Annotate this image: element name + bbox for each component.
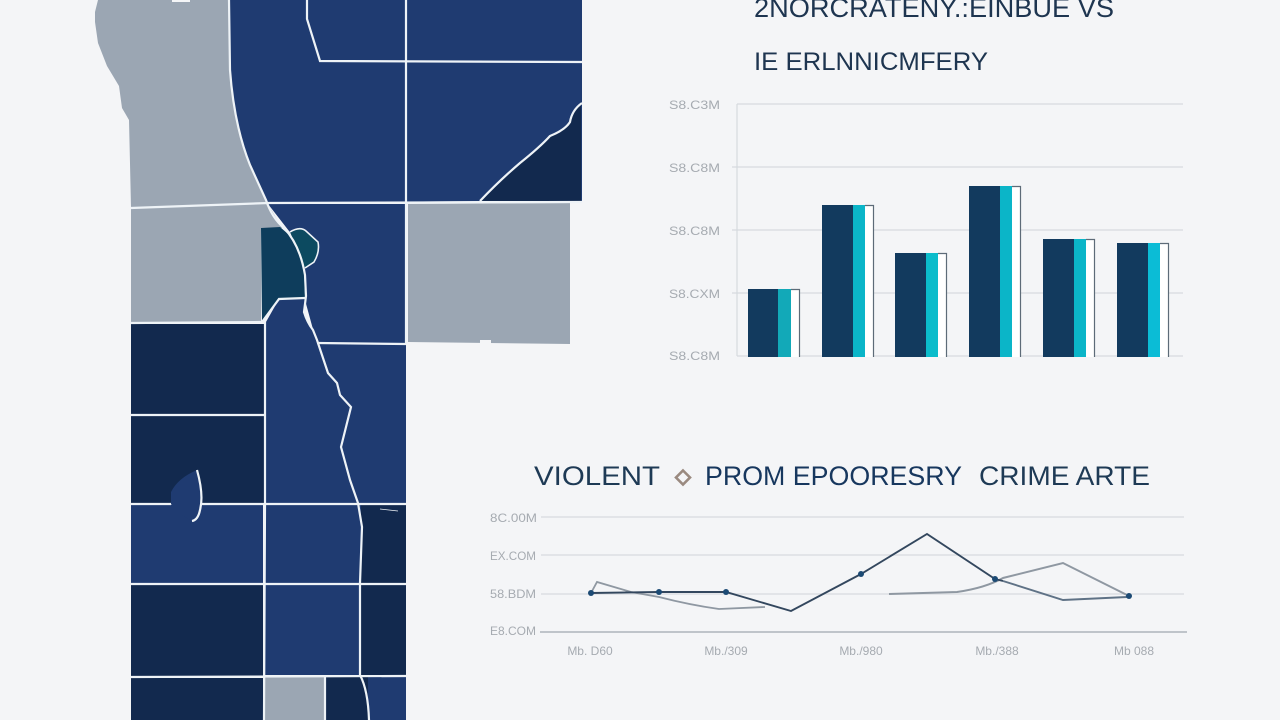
region: dark county south xyxy=(326,677,370,720)
line chart y axis labels: 58.BDM xyxy=(490,587,536,601)
region: north-west gray county xyxy=(95,0,270,207)
region: teal lake xyxy=(290,229,318,268)
map notch: east county edge xyxy=(480,340,491,344)
region: blue lake xyxy=(171,470,201,522)
line chart y axis labels: 8C.00M xyxy=(490,511,537,525)
bar chart y axis labels: S8.C8M xyxy=(669,161,720,175)
region: dark county east 3 xyxy=(361,505,406,583)
icon: diamond separator xyxy=(676,470,690,484)
bar chart grid xyxy=(732,104,1183,356)
region: dark county row 4 xyxy=(131,585,263,676)
bar group 4 xyxy=(969,186,1020,357)
region: dark county row 2 xyxy=(131,416,264,503)
choropleth map xyxy=(95,0,582,720)
line chart xyxy=(490,511,1187,658)
bar group 5 xyxy=(1043,239,1094,357)
region: northern blue counties xyxy=(230,0,582,203)
line chart y axis labels: E8.COM xyxy=(490,624,536,638)
bar group 2 xyxy=(822,205,874,357)
bar chart y axis labels: S8.CXM xyxy=(669,287,720,301)
county boundary lines xyxy=(131,0,582,720)
top chart title xyxy=(754,0,1114,76)
line chart x axis labels: Mb./980 xyxy=(839,644,883,658)
line chart title xyxy=(534,461,1150,491)
region: east gray county xyxy=(408,203,570,344)
bar chart y axis labels: S8.C8M xyxy=(669,349,720,363)
map notch: top edge xyxy=(172,0,190,2)
bar group 1 xyxy=(748,289,800,357)
region: north-east dark county xyxy=(480,105,581,201)
series markers xyxy=(588,571,1132,599)
series: dark line fading tail xyxy=(1003,581,1127,600)
line chart y axis labels xyxy=(490,511,537,638)
bar group 6 xyxy=(1117,243,1168,357)
title word: crime rate: CRIME ARTE xyxy=(979,461,1150,491)
region: dark county row 5 xyxy=(131,678,263,720)
region: blue county row 3 xyxy=(131,505,263,583)
bar chart y axis labels xyxy=(669,98,720,363)
region: blue county middle 3 xyxy=(265,505,361,583)
line chart x axis labels: Mb./309 xyxy=(704,644,748,658)
region: dark county east 4 xyxy=(361,585,406,675)
region: teal county xyxy=(261,227,305,322)
bar group 3 xyxy=(895,253,946,357)
region: blue county south xyxy=(368,677,406,720)
region: dark county row 1 xyxy=(131,324,264,414)
bar chart y axis labels: S8.C8M xyxy=(669,224,720,238)
bar chart y axis labels: S8.C3M xyxy=(669,98,720,112)
title word: property: PROM EPOORESRY xyxy=(705,461,962,491)
bar chart xyxy=(669,98,1183,363)
line chart x axis labels: Mb. D60 xyxy=(567,644,613,658)
line chart x axis labels: Mb./388 xyxy=(975,644,1019,658)
region: south central blue county xyxy=(266,298,406,504)
region: blue county middle 4 xyxy=(265,585,361,675)
series: dark line xyxy=(591,534,1003,611)
title line 2: IE ERLNNICMFERY xyxy=(754,48,988,76)
line chart grid xyxy=(540,517,1187,632)
line chart x axis labels: Mb 088 xyxy=(1114,644,1154,658)
line chart x axis labels xyxy=(567,644,1154,658)
line chart y axis labels: EX.COM xyxy=(490,549,536,563)
region: central blue county xyxy=(268,204,406,344)
series: gray line left xyxy=(591,582,765,609)
title word: violent: VIOLENT xyxy=(534,461,660,491)
region: gray county south xyxy=(265,677,324,720)
series: gray line right xyxy=(889,563,1127,595)
region: west gray county xyxy=(131,204,282,322)
